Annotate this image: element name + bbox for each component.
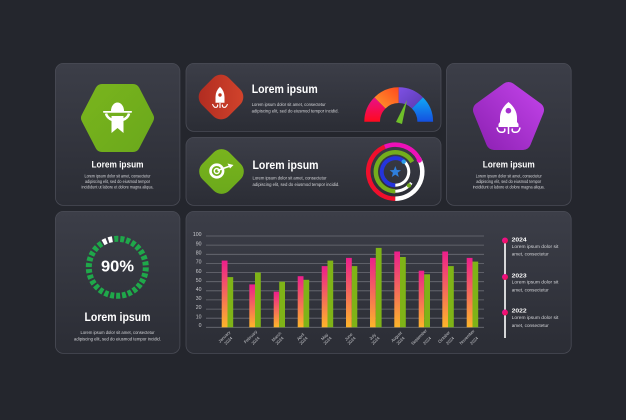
month labels: 2024 [346,335,357,346]
gauge chart [364,87,433,124]
heading: Lorem ipsum [92,160,144,170]
bar chart [193,232,484,346]
panel: percentage card [55,211,180,353]
text block: Lorem ipsum dolor sit amet, consectetur [84,173,151,178]
y axis labels: 100 [193,232,202,238]
timeline item 2022 [502,309,559,329]
month labels: April [296,332,305,341]
y axis labels: 50 [196,278,202,284]
month labels: June [344,331,354,342]
y axis labels: 10 [196,314,202,320]
panel: right rocket card [446,63,571,205]
heading: Lorem ipsum [84,310,150,324]
gauge needle [396,100,407,124]
heading: Lorem ipsum [483,160,535,170]
text block: Lorem ipsum dolor sit amet, consectetur [252,176,327,180]
text block: adipiscing elit, sed do eiusmod tempor [476,179,542,184]
text block: adipiscing elit, sed do eiusmod tempor incidid. [74,337,161,342]
donut chart: 90 percent [78,228,156,306]
text block [252,102,339,114]
timeline item 2023: Lorem ipsum dolor sit [512,280,559,286]
month labels: 2024 [274,335,285,346]
text block [82,173,154,190]
y axis labels: 80 [196,250,202,256]
icon: purple pentagon with rocket [481,90,536,142]
y axis labels: 30 [196,296,202,302]
timeline item 2024 [502,238,559,258]
month labels: 2024 [445,335,456,346]
month labels: October [437,330,451,344]
text block: Lorem ipsum dolor sit amet, consectetur [80,330,155,335]
month labels: September [410,328,428,346]
month labels: 2024 [223,335,234,346]
timeline item 2022: 2022 [512,309,527,315]
month labels: May [320,331,330,341]
panel: gauge card [186,63,441,131]
month labels: November [458,328,476,346]
month labels: January [217,329,232,344]
timeline item 2024: 2024 [512,238,528,244]
timeline item 2024: amet, consectetur [512,252,549,258]
month labels [217,328,480,346]
y axis labels: 20 [196,305,202,311]
panel: rings card [186,137,441,205]
month labels: 2024 [395,335,406,346]
text block [74,330,161,342]
y axis labels: 40 [196,287,202,293]
timeline item 2022: amet, consectetur [512,323,549,329]
y axis labels: 60 [196,269,202,275]
timeline legend [502,238,559,338]
text block: Lorem ipsum dolor sit amet, consectetur [252,102,326,107]
text block: adipiscing elit, sed do eiusmod tempor [85,179,151,184]
text block [473,173,545,190]
percentage value: 90% [101,258,134,276]
icon: red diamond with rocket [194,70,248,124]
text block: adipiscing elit, sed do eiusmod tempor incidid. [252,182,340,187]
month labels: 2024 [298,335,309,346]
text block: adipiscing elit, sed do eiusmod tempor incidid. [252,108,339,114]
panel: left profile card [55,63,180,205]
month labels: July [368,332,378,341]
icon: green hexagon with figure [88,91,147,145]
icon: green diamond with target [195,145,248,198]
month labels: March [271,330,283,343]
icon: star [390,166,401,177]
radial progress chart [368,145,422,199]
month labels: 2024 [322,335,333,346]
month labels: February [243,328,259,344]
month labels: 2024 [250,335,261,346]
month labels: 2024 [370,335,381,346]
heading: Lorem ipsum [252,158,318,172]
text block: incididunt ut labore et dolore magna aliqua. [473,185,545,190]
timeline item 2023: 2023 [512,274,527,280]
y axis labels [193,232,202,329]
timeline item 2023: amet, consectetur [512,288,549,294]
timeline item 2024: Lorem ipsum dolor sit [512,244,559,250]
month labels: August [390,330,403,343]
y axis labels: 70 [196,260,202,266]
text block: incididunt ut labore et dolore magna aliqua. [82,185,154,190]
heading: Lorem ipsum [252,82,318,96]
y axis labels: 90 [196,242,202,248]
month labels: 2024 [422,335,433,346]
text block: Lorem ipsum dolor sit amet, consectetur [476,173,542,178]
month labels: 2024 [469,335,480,346]
bars [222,248,478,327]
timeline item 2022: Lorem ipsum dolor sit [512,315,559,321]
panel: bar chart card [186,211,571,353]
y axis labels: 0 [199,323,202,329]
text block [252,176,340,187]
timeline item 2023 [502,274,559,294]
